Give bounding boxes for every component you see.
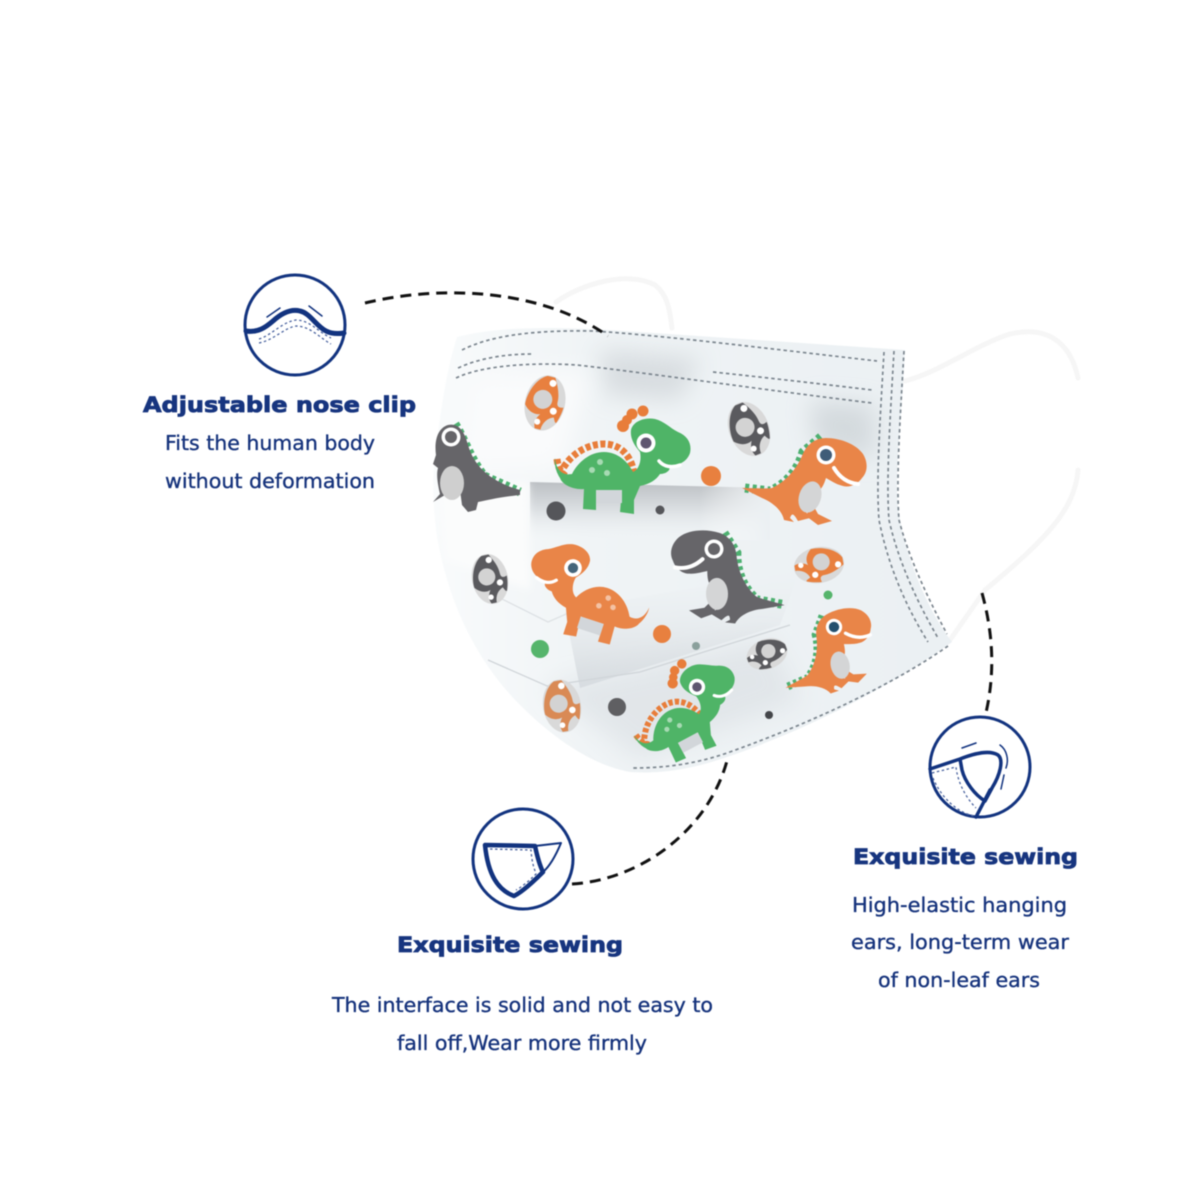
text: ear loop description bbox=[851, 893, 1070, 992]
dinosaur: orange lower right bbox=[763, 595, 894, 715]
dinosaur: gray left bbox=[433, 424, 520, 512]
ear loops bbox=[556, 279, 1078, 640]
text: ear loop description: ears, long-term wear bbox=[851, 930, 1070, 954]
text: nose clip description bbox=[165, 431, 375, 493]
icon: ear loop bbox=[930, 717, 1030, 817]
egg: gray left bbox=[467, 551, 513, 607]
icon: mask sewing bbox=[473, 809, 573, 909]
heading: bottom sewing: Exquisite sewing bbox=[397, 933, 623, 957]
dinosaur: green bottom bbox=[613, 641, 759, 778]
text: bottom sewing description: fall off,Wear more firmly bbox=[397, 1031, 647, 1055]
leader line: ear loop bbox=[982, 593, 992, 717]
egg: gray top bbox=[720, 396, 778, 462]
egg: orange lower bbox=[539, 677, 585, 735]
polka dots bbox=[531, 466, 832, 719]
egg: orange top bbox=[519, 371, 571, 435]
pleat shading bbox=[488, 347, 880, 751]
heading: ear loop sewing: Exquisite sewing bbox=[853, 845, 1078, 869]
egg: gray lower bbox=[742, 633, 792, 675]
leader line: bottom sewing bbox=[572, 757, 728, 884]
text: bottom sewing description: The interface is solid and not easy to bbox=[331, 993, 713, 1017]
leader line: nose clip bbox=[365, 293, 608, 336]
dinosaur: orange top right bbox=[742, 436, 867, 525]
heading: nose clip: Adjustable nose clip bbox=[143, 393, 416, 417]
dinosaur: orange left bbox=[513, 522, 664, 657]
text: bottom sewing description bbox=[331, 993, 713, 1055]
text: ear loop description: High-elastic hanging bbox=[852, 893, 1067, 917]
text: ear loop description: of non-leaf ears bbox=[878, 968, 1040, 992]
text: nose clip description: without deformation bbox=[165, 469, 375, 493]
icon: nose clip bbox=[245, 275, 345, 375]
mask body bbox=[433, 328, 952, 772]
egg: orange right bbox=[791, 543, 847, 587]
face mask bbox=[433, 328, 952, 778]
stitching bbox=[456, 331, 948, 768]
text: nose clip description: Fits the human body bbox=[165, 431, 375, 455]
dinosaur: green top bbox=[555, 406, 690, 514]
dinosaur: gray center bbox=[655, 519, 800, 641]
